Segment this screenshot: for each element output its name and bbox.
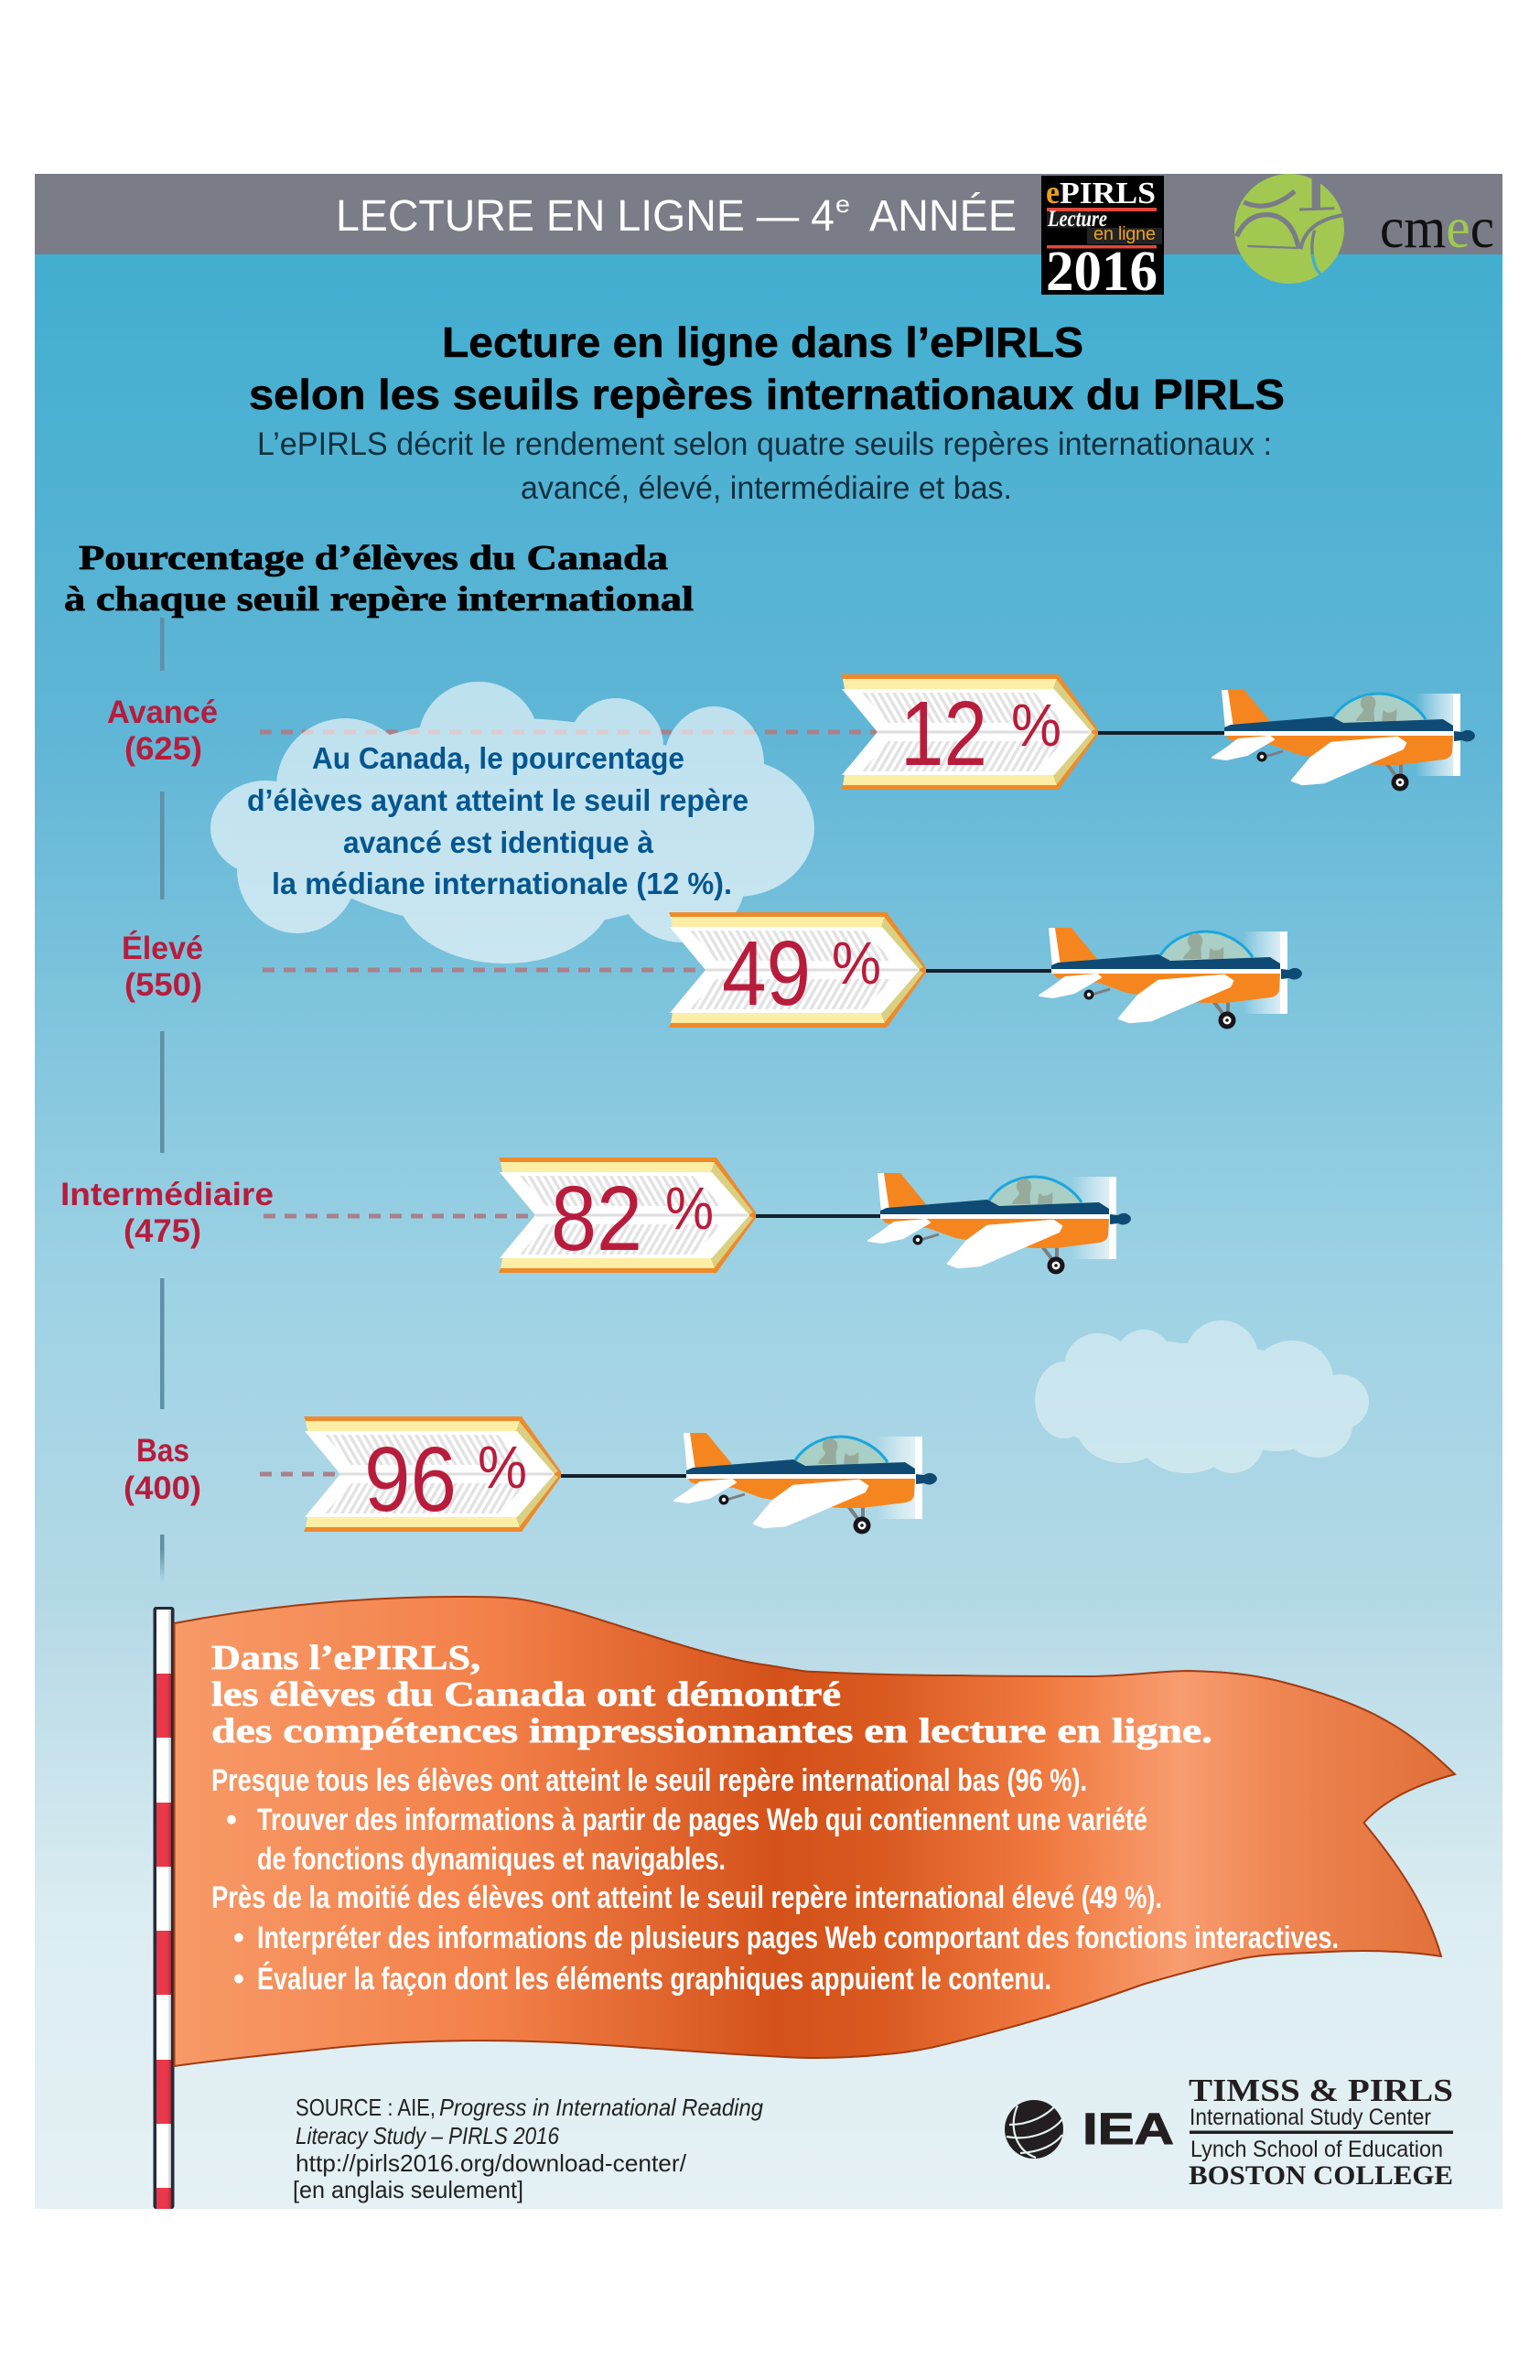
source note: Literacy Study – PIRLS 2016 [296, 2122, 559, 2149]
subtitle: L’ePIRLS décrit le rendement selon quatre seuils repères internationaux : [257, 426, 1272, 462]
banner 12 %: % [1011, 691, 1061, 759]
banner 82 %: % [665, 1174, 714, 1242]
main title: selon les seuils repères internationaux du PIRLS [249, 371, 1285, 418]
plane [1039, 928, 1302, 1028]
main title [249, 318, 1285, 418]
subtitle [257, 426, 1272, 506]
benchmark axis line [160, 618, 165, 1583]
banner row: 96 % [304, 1416, 937, 1534]
logo: TIMSS & PIRLS, Boston College: International Study Center [1190, 2105, 1431, 2130]
source note: Progress in International Reading [439, 2094, 763, 2121]
flag body text: • [226, 1803, 237, 1837]
header title: ANNÉE [869, 192, 1017, 241]
logo: ePIRLS 2016: PIRLS [1060, 177, 1156, 210]
banner 96 % [304, 1416, 561, 1532]
logo: TIMSS & PIRLS, Boston College: Lynch School of Education [1190, 2137, 1443, 2162]
chart heading: Pourcentage d’élèves du Canada [79, 539, 668, 577]
benchmark labels: Intermédiaire [60, 1177, 274, 1212]
benchmark labels: (625) [124, 731, 202, 767]
benchmark labels: (550) [124, 967, 202, 1003]
flag body text: Évaluer la façon dont les éléments graphiques appuient le contenu. [257, 1962, 1051, 1997]
logo: ePIRLS 2016: Lecture [1047, 207, 1107, 232]
source note: [en anglais seulement] [293, 2176, 523, 2203]
callout text: la médiane internationale (12 %). [272, 867, 732, 900]
banner 12 %: 12 [900, 683, 987, 785]
benchmark labels: (475) [124, 1213, 201, 1249]
logo: ePIRLS 2016: e [1046, 174, 1060, 210]
benchmark labels: Élevé [122, 930, 203, 966]
benchmark labels: Avancé [107, 695, 218, 730]
banner row: 12 % [841, 674, 1475, 791]
logo: IEA [1005, 2100, 1174, 2159]
logo: IEA: IEA [1082, 2105, 1174, 2154]
banner row: 82 % [499, 1158, 1131, 1274]
chart heading [64, 539, 694, 619]
flag pole [154, 1607, 174, 2209]
flag heading: des compétences impressionnantes en lecture en ligne. [211, 1712, 1212, 1750]
source note [293, 2094, 763, 2203]
plane [1212, 690, 1475, 791]
flag body text: de fonctions dynamiques et navigables. [257, 1842, 726, 1877]
logo: CMEC: cmec [1380, 195, 1494, 260]
chart heading: à chaque seuil repère international [64, 580, 694, 619]
flag body text: • [233, 1962, 244, 1997]
banner 49 % [669, 912, 926, 1028]
banner 96 %: % [478, 1433, 527, 1501]
plane [674, 1433, 937, 1534]
flag heading: Dans l’ePIRLS, [211, 1639, 480, 1677]
subtitle: avancé, élevé, intermédiaire et bas. [521, 470, 1012, 506]
callout text: Au Canada, le pourcentage [312, 741, 684, 775]
logo: TIMSS & PIRLS, Boston College: BOSTON COLLEGE [1189, 2160, 1453, 2191]
banner 82 % [499, 1158, 756, 1273]
callout text [247, 741, 748, 900]
header title: LECTURE EN LIGNE — 4 [336, 192, 835, 241]
header band [35, 174, 1502, 254]
banner 49 %: 49 [722, 922, 811, 1025]
main title: Lecture en ligne dans l’ePIRLS [442, 318, 1083, 366]
logo: TIMSS & PIRLS, Boston College: TIMSS & PIRLS [1189, 2073, 1453, 2108]
banner 96 %: 96 [364, 1428, 457, 1531]
logo: ePIRLS 2016 [1041, 174, 1164, 303]
callout cloud [210, 682, 814, 964]
flag heading [211, 1639, 1212, 1750]
callout text: d’élèves ayant atteint le seuil repère [247, 783, 748, 817]
flag body text: • [233, 1921, 244, 1955]
plane [868, 1173, 1131, 1274]
banner 82 %: 82 [551, 1168, 642, 1270]
flag body text: Trouver des informations à partir de pages Web qui contiennent une variété [257, 1803, 1147, 1837]
source note: http://pirls2016.org/download-center/ [296, 2149, 687, 2177]
logo: ePIRLS 2016: en ligne [1093, 224, 1156, 244]
header title: e [835, 190, 850, 218]
flag body text [211, 1763, 1339, 1997]
logo: CMEC [1234, 174, 1494, 284]
banner row: 49 % [669, 912, 1302, 1028]
logo: ePIRLS 2016: 2016 [1046, 241, 1158, 303]
flag body text: Près de la moitié des élèves ont atteint le seuil repère international élevé (49 %). [211, 1880, 1162, 1915]
flag panel [174, 1597, 1455, 2066]
sky background [35, 254, 1502, 2209]
dashed benchmark lines [260, 732, 878, 1474]
small cloud [1035, 1320, 1369, 1473]
logo: TIMSS & PIRLS, Boston College [1189, 2073, 1453, 2191]
flag body text: Presque tous les élèves ont atteint le seuil repère international bas (96 %). [211, 1763, 1087, 1798]
banner 12 % [841, 674, 1098, 790]
flag heading: les élèves du Canada ont démontré [211, 1675, 841, 1714]
callout text: avancé est identique à [343, 825, 654, 859]
benchmark labels [60, 695, 274, 1506]
benchmark labels: Bas [136, 1433, 189, 1469]
source note: SOURCE : AIE, [296, 2094, 436, 2121]
benchmark labels: (400) [124, 1470, 201, 1506]
banner 49 %: % [832, 929, 881, 996]
